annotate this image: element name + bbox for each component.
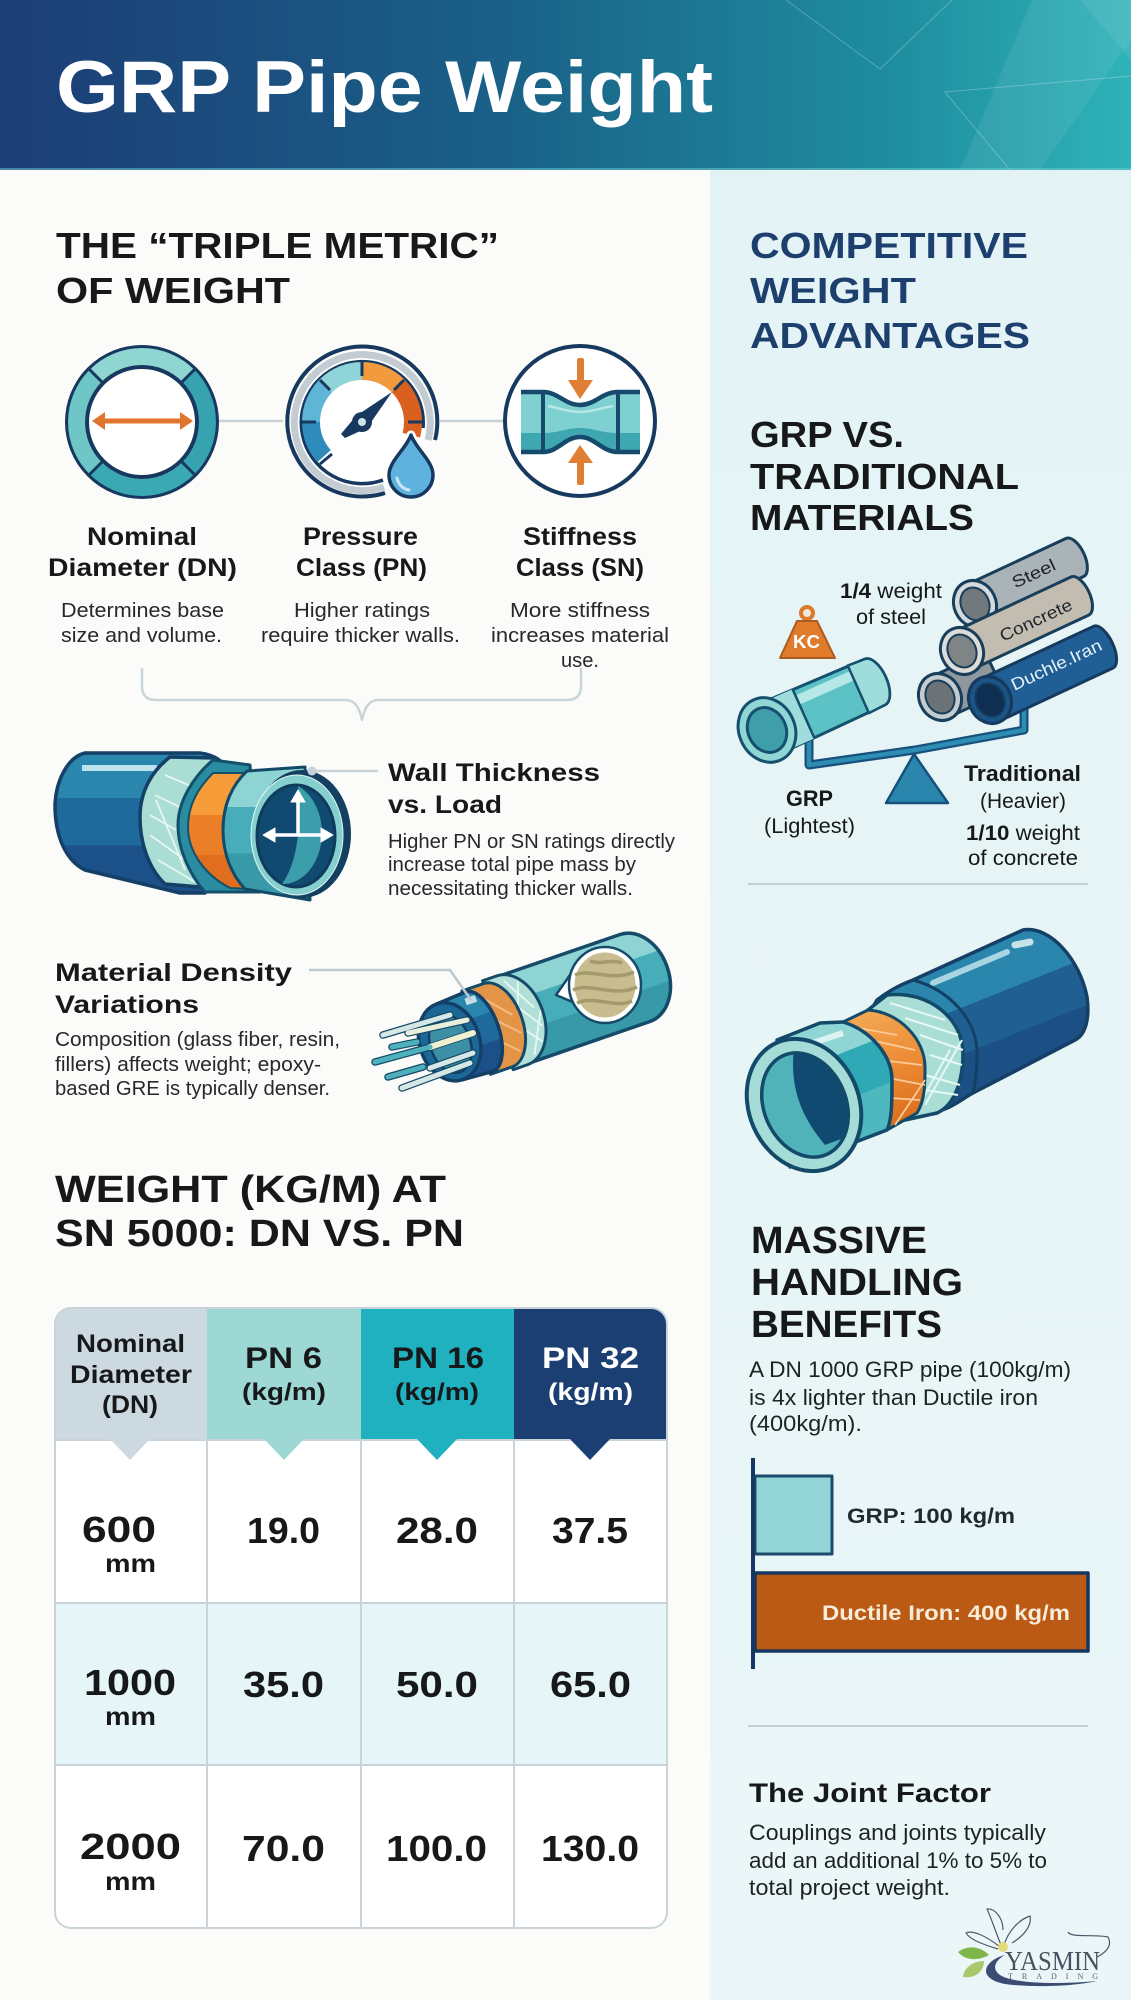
row: 600 mm: 600: [82, 1509, 156, 1550]
bar: GRP: [755, 1476, 1015, 1554]
label: nominal diameter: Nominal: [87, 523, 197, 551]
text: material density variations: Variations: [55, 991, 199, 1019]
table row tint: [55, 1603, 667, 1765]
bar: GRP: GRP: 100 kg/m: [847, 1505, 1015, 1528]
heading: weight table: [55, 1169, 464, 1255]
text: traditional heavier: Traditional: [964, 761, 1081, 786]
row: 600 mm: [82, 1509, 628, 1578]
heading: triple metric: THE “TRIPLE METRIC”: [56, 225, 499, 266]
illustration: layered GRP pipe: [726, 930, 1088, 1189]
label: stiffness class: [491, 523, 669, 672]
text: the joint factor: The Joint Factor: [749, 1778, 992, 1808]
title: GRP Pipe Weight: [56, 47, 713, 128]
header text: (DN): [102, 1391, 158, 1419]
illustration: wall thickness pipe cross-section: [55, 753, 378, 900]
text: traditional heavier: 1/10 weight: [966, 822, 1080, 845]
pipe: grey lower: [911, 650, 1005, 728]
text: the joint factor: total project weight.: [749, 1875, 950, 1900]
text: material density variations: Material Density: [55, 959, 292, 987]
logo: Yasmin Trading: TRADING: [1008, 1972, 1098, 1981]
text: the joint factor: [749, 1778, 1047, 1900]
pipe: ductile iron: [961, 621, 1122, 731]
row: 1000 mm: mm: [105, 1703, 156, 1731]
callout line: [309, 970, 471, 1000]
header text: Diameter: [70, 1361, 192, 1389]
pipe: steel: Steel: [1009, 556, 1059, 592]
callout line: [308, 766, 378, 776]
chart: balance scale comparison: [728, 532, 1122, 870]
text: 1/4 weight of steel: [840, 580, 942, 629]
label: stiffness class: Class (SN): [516, 554, 644, 582]
row: 1000 mm: 35.0: [243, 1664, 324, 1705]
pipe: steel: [946, 532, 1094, 635]
text: material density variations: [55, 959, 340, 1100]
row: 2000 mm: 2000: [80, 1826, 181, 1867]
text: GRP lightest: [764, 786, 855, 838]
text: the joint factor: add an additional 1% to 5% to: [749, 1848, 1047, 1873]
text: wall thickness vs load: necessitating thicker walls.: [388, 878, 633, 900]
row: 1000 mm: 65.0: [550, 1664, 631, 1705]
text: material density variations: fillers) affects weight; epoxy-: [55, 1054, 321, 1076]
heading: GRP vs traditional materials: TRADITIONAL: [750, 456, 1019, 497]
header pointers: [110, 1439, 610, 1460]
header cells: [55, 1308, 667, 1440]
header text: [70, 1330, 639, 1419]
heading: triple metric: OF WEIGHT: [56, 270, 290, 311]
text: 1/4 weight of steel: 1/4 weight: [840, 580, 942, 603]
text: traditional heavier: [964, 761, 1081, 870]
label: pressure class: Higher ratings: [294, 600, 430, 622]
logo: Yasmin Trading: YASMIN: [1005, 1946, 1100, 1976]
illustration: material density fibre pipe: [309, 922, 682, 1096]
heading: massive handling benefits: BENEFITS: [751, 1304, 942, 1346]
label: nominal diameter: [48, 523, 237, 647]
icon: pressure gauge with drop: [287, 347, 437, 497]
row: 600 mm: mm: [105, 1550, 156, 1578]
heading: GRP vs traditional materials: GRP VS.: [750, 414, 904, 455]
text: wall thickness vs load: Wall Thickness: [388, 759, 600, 787]
pipe: ductile iron: Duchle.Iran: [1008, 636, 1105, 694]
row: 2000 mm: 130.0: [541, 1828, 639, 1869]
row: 1000 mm: 50.0: [396, 1664, 478, 1705]
label: pressure class: Pressure: [303, 523, 418, 551]
text: GRP lightest: GRP: [786, 786, 833, 811]
right panel background: [710, 170, 1131, 2000]
bar: ductile iron: Ductile Iron: 400 kg/m: [822, 1602, 1070, 1625]
heading: weight table: SN 5000: DN VS. PN: [55, 1213, 464, 1255]
heading: competitive weight advantages: ADVANTAGES: [750, 315, 1030, 356]
label: stiffness class: Stiffness: [523, 523, 637, 551]
text: material density variations: Composition (glass fiber, resin,: [55, 1029, 340, 1051]
chart axis: [751, 1458, 755, 1669]
table grid: [55, 1308, 667, 1928]
row: 600 mm: 37.5: [552, 1510, 628, 1551]
text: traditional heavier: of concrete: [968, 847, 1078, 870]
label: stiffness class: More stiffness: [510, 600, 650, 622]
pipe: GRP: [728, 647, 899, 772]
header text: PN 6: [245, 1342, 322, 1375]
glass fibres: [375, 1015, 473, 1088]
row: 600 mm: 28.0: [396, 1510, 478, 1551]
heading: massive handling benefits: HANDLING: [751, 1262, 963, 1304]
heading: GRP vs traditional materials: [750, 414, 1019, 538]
row: 2000 mm: 70.0: [242, 1828, 325, 1869]
text: wall thickness vs load: [388, 759, 675, 900]
bar: ductile iron: [755, 1573, 1088, 1651]
heading: competitive weight advantages: [750, 225, 1030, 356]
logo leaves: [958, 1947, 989, 1977]
text: handling description: [749, 1357, 1071, 1436]
text: wall thickness vs load: increase total pipe mass by: [388, 854, 636, 876]
heading: massive handling benefits: [751, 1220, 963, 1346]
text: wall thickness vs load: Higher PN or SN ratings directly: [388, 831, 675, 853]
header banner: [0, 0, 1131, 170]
text: wall thickness vs load: vs. Load: [388, 791, 502, 819]
bar chart: GRP vs ductile iron: [751, 1458, 1088, 1669]
text: material density variations: based GRE is typically denser.: [55, 1078, 330, 1100]
label: nominal diameter: Determines base: [61, 600, 224, 622]
heading: massive handling benefits: MASSIVE: [751, 1220, 927, 1262]
header text: PN 32: [542, 1342, 639, 1375]
pipe: concrete: [933, 570, 1099, 682]
pipe: concrete: Concrete: [997, 595, 1075, 645]
row: 1000 mm: [84, 1662, 631, 1731]
label: nominal diameter: size and volume.: [61, 625, 222, 647]
icon: kg weight: KC: [793, 632, 820, 652]
heading: weight table: WEIGHT (KG/M) AT: [55, 1169, 446, 1211]
label: nominal diameter: Diameter (DN): [48, 554, 237, 582]
text: 1/4 weight of steel: of steel: [856, 606, 926, 629]
heading: triple metric: [56, 225, 499, 311]
heading: competitive weight advantages: WEIGHT: [750, 270, 916, 311]
header text: (kg/m): [242, 1379, 326, 1406]
label: pressure class: require thicker walls.: [261, 625, 460, 647]
heading: GRP vs traditional materials: MATERIALS: [750, 497, 974, 538]
text: handling description: A DN 1000 GRP pipe (100kg/m): [749, 1357, 1071, 1382]
bracket joining metrics: [142, 668, 581, 720]
header text: (kg/m): [395, 1379, 479, 1406]
magnified fibre inset: [556, 947, 641, 1023]
text: the joint factor: Couplings and joints typically: [749, 1820, 1046, 1845]
text: GRP lightest: (Lightest): [764, 815, 855, 838]
header text: (kg/m): [548, 1379, 633, 1406]
icon: nominal diameter ring: [67, 347, 217, 497]
row: 600 mm: 19.0: [247, 1510, 320, 1551]
label: pressure class: Class (PN): [296, 554, 427, 582]
text: traditional heavier: (Heavier): [980, 790, 1066, 813]
header text: Nominal: [76, 1330, 185, 1358]
connector lines between icons: [218, 420, 504, 422]
row: 2000 mm: [80, 1826, 639, 1896]
icon: load arrows: [263, 790, 333, 842]
heading: competitive weight advantages: COMPETITIVE: [750, 225, 1028, 266]
icon: kg weight: [780, 607, 835, 658]
row: 1000 mm: 1000: [84, 1662, 176, 1703]
label: stiffness class: increases material: [491, 625, 669, 647]
header text: PN 16: [392, 1342, 484, 1375]
logo: Yasmin Trading: [958, 1909, 1110, 1986]
scale beam: [809, 708, 1024, 803]
label: pressure class: [261, 523, 460, 647]
text: handling description: (400kg/m).: [749, 1411, 862, 1436]
icon: stiffness squeezed pipe: [505, 346, 655, 496]
label: stiffness class: use.: [561, 650, 599, 672]
row: 2000 mm: mm: [105, 1868, 156, 1896]
table: weight by DN and PN: [55, 1308, 667, 1928]
row: 2000 mm: 100.0: [386, 1828, 487, 1869]
text: handling description: is 4x lighter than Ductile iron: [749, 1385, 1038, 1410]
